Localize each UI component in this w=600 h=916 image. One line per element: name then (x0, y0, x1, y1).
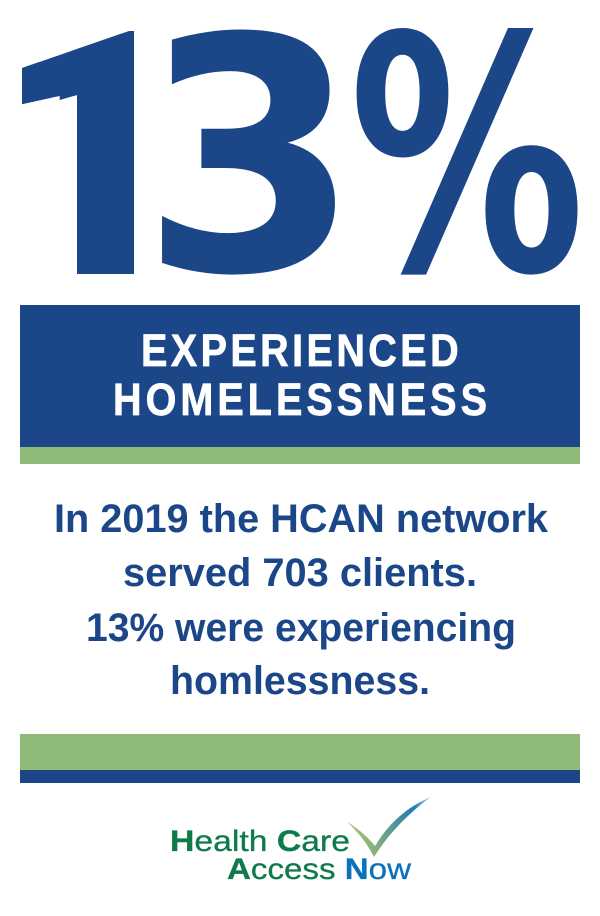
banner heading line 2: HOMELESSNESS (113, 375, 487, 425)
logo text: Health Care: Health Care (170, 825, 350, 858)
blue bar (20, 770, 580, 783)
big statistic: 13% (22, 28, 578, 275)
icon: check mark (347, 797, 431, 857)
banner: experienced homelessness (20, 305, 580, 464)
body text block (54, 497, 549, 703)
banner heading line 1: EXPERIENCED (141, 326, 459, 376)
body line 4: homlessness. (170, 659, 430, 703)
body line 1: In 2019 the HCAN network (54, 497, 549, 541)
green bar (20, 734, 580, 770)
body line 3: 13% were experiencing (86, 606, 516, 650)
banner green stripe (20, 447, 580, 464)
footer colour bars (20, 734, 580, 783)
logo text: Access Now: Access Now (227, 853, 411, 886)
body line 2: served 703 clients. (123, 551, 477, 595)
banner background (20, 305, 580, 447)
logo: Health Care Access Now (170, 797, 431, 886)
